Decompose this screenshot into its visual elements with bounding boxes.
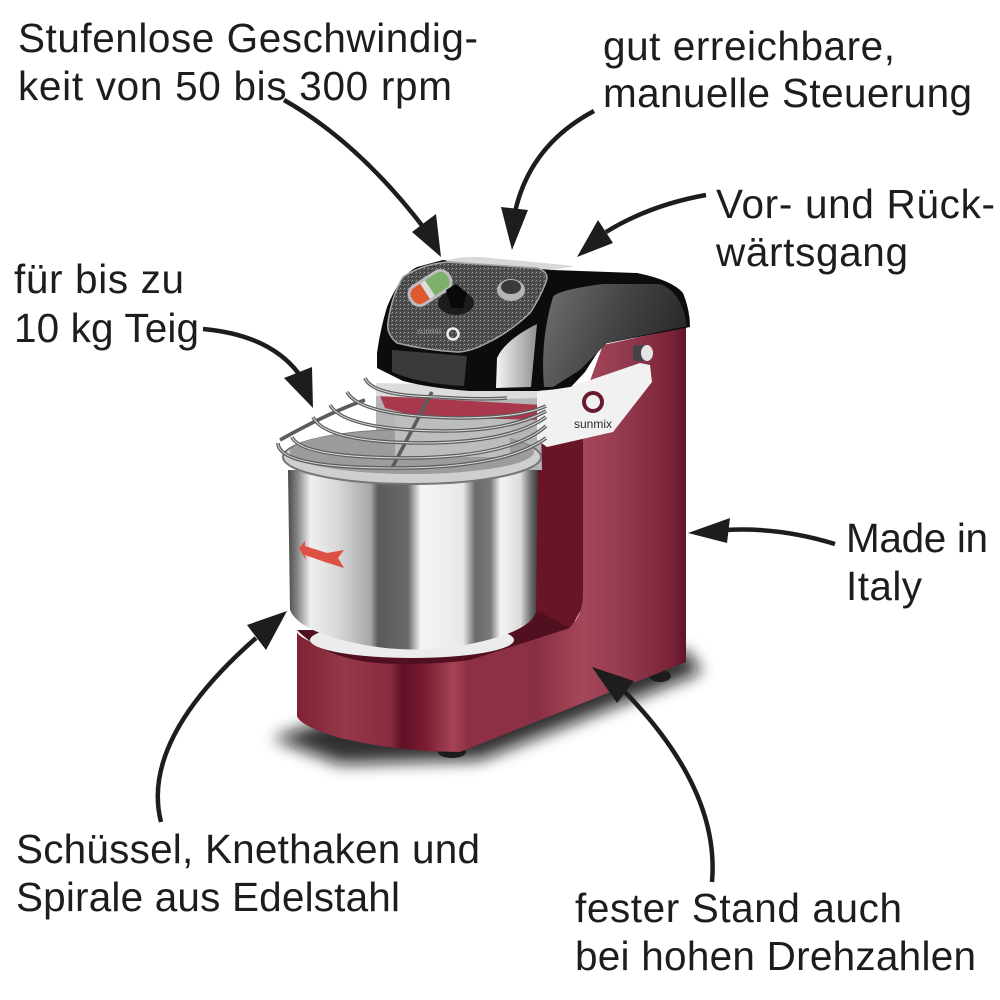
mixer: Sunmix spiral kneader (272, 257, 702, 764)
label: direction: Vor- und Rück- (716, 181, 995, 227)
arrow: dough capacity (203, 329, 313, 408)
speed knob (438, 284, 474, 315)
label: capacity: 10 kg Teig (14, 305, 199, 351)
red strip behind guard (380, 396, 543, 420)
wire safety guard (278, 378, 546, 468)
arrow: controls (501, 111, 594, 250)
label: direction: wärtsgang (715, 229, 908, 275)
steel bowl (288, 470, 538, 650)
red arrow mark on bowl (299, 541, 344, 568)
label: materials: Spirale aus Edelstahl (16, 874, 400, 920)
arrow: firm stand (592, 667, 713, 882)
label: speed: Stufenlose Geschwindig- (18, 15, 478, 61)
label: controls: gut erreichbare, (603, 23, 895, 69)
black head (377, 260, 690, 391)
label: speed: keit von 50 bis 300 rpm (18, 63, 452, 109)
silver neck (376, 383, 540, 400)
logo on panel (417, 327, 458, 340)
dark red recess (470, 430, 590, 665)
granite control panel (388, 262, 547, 352)
arrow: stainless steel bowl (158, 611, 287, 822)
bowl rim and interior (283, 430, 541, 484)
floor shadow (272, 650, 702, 764)
arrow: made in Italy (688, 518, 835, 544)
grey side panel (543, 284, 687, 387)
dark band under bowl (297, 612, 570, 664)
head top highlight (445, 257, 575, 270)
label: materials (16, 826, 480, 920)
label: stability (575, 885, 976, 979)
silver reflection (496, 324, 537, 388)
feet (438, 670, 671, 758)
label: stability: bei hohen Drehzahlen (575, 933, 976, 979)
red base and column (297, 327, 686, 752)
label: origin: Made in (846, 515, 988, 561)
start stop switch (403, 265, 457, 311)
label: stability: fester Stand auch (575, 885, 902, 931)
label: materials: Schüssel, Knethaken und (16, 826, 480, 872)
label: controls: manuelle Steuerung (603, 70, 972, 116)
logo on panel: sunmix (417, 327, 442, 336)
label: controls (603, 23, 972, 116)
label: capacity (14, 256, 199, 351)
label: origin: Italy (846, 563, 923, 609)
white bowl support plate (310, 622, 514, 658)
direction knob (497, 279, 525, 301)
label: capacity: für bis zu (14, 256, 184, 302)
arrow: speed to knob (284, 100, 441, 257)
label: direction (715, 181, 995, 275)
label: speed (18, 15, 478, 109)
white hinge plate with logo: sunmix (574, 417, 612, 431)
label: origin (846, 515, 988, 609)
arrow: forward and reverse (577, 195, 706, 257)
inner machine behind guard (320, 385, 542, 470)
pivot bolt (633, 345, 653, 361)
white hinge plate with logo (537, 363, 652, 447)
lower front panel (392, 350, 467, 386)
